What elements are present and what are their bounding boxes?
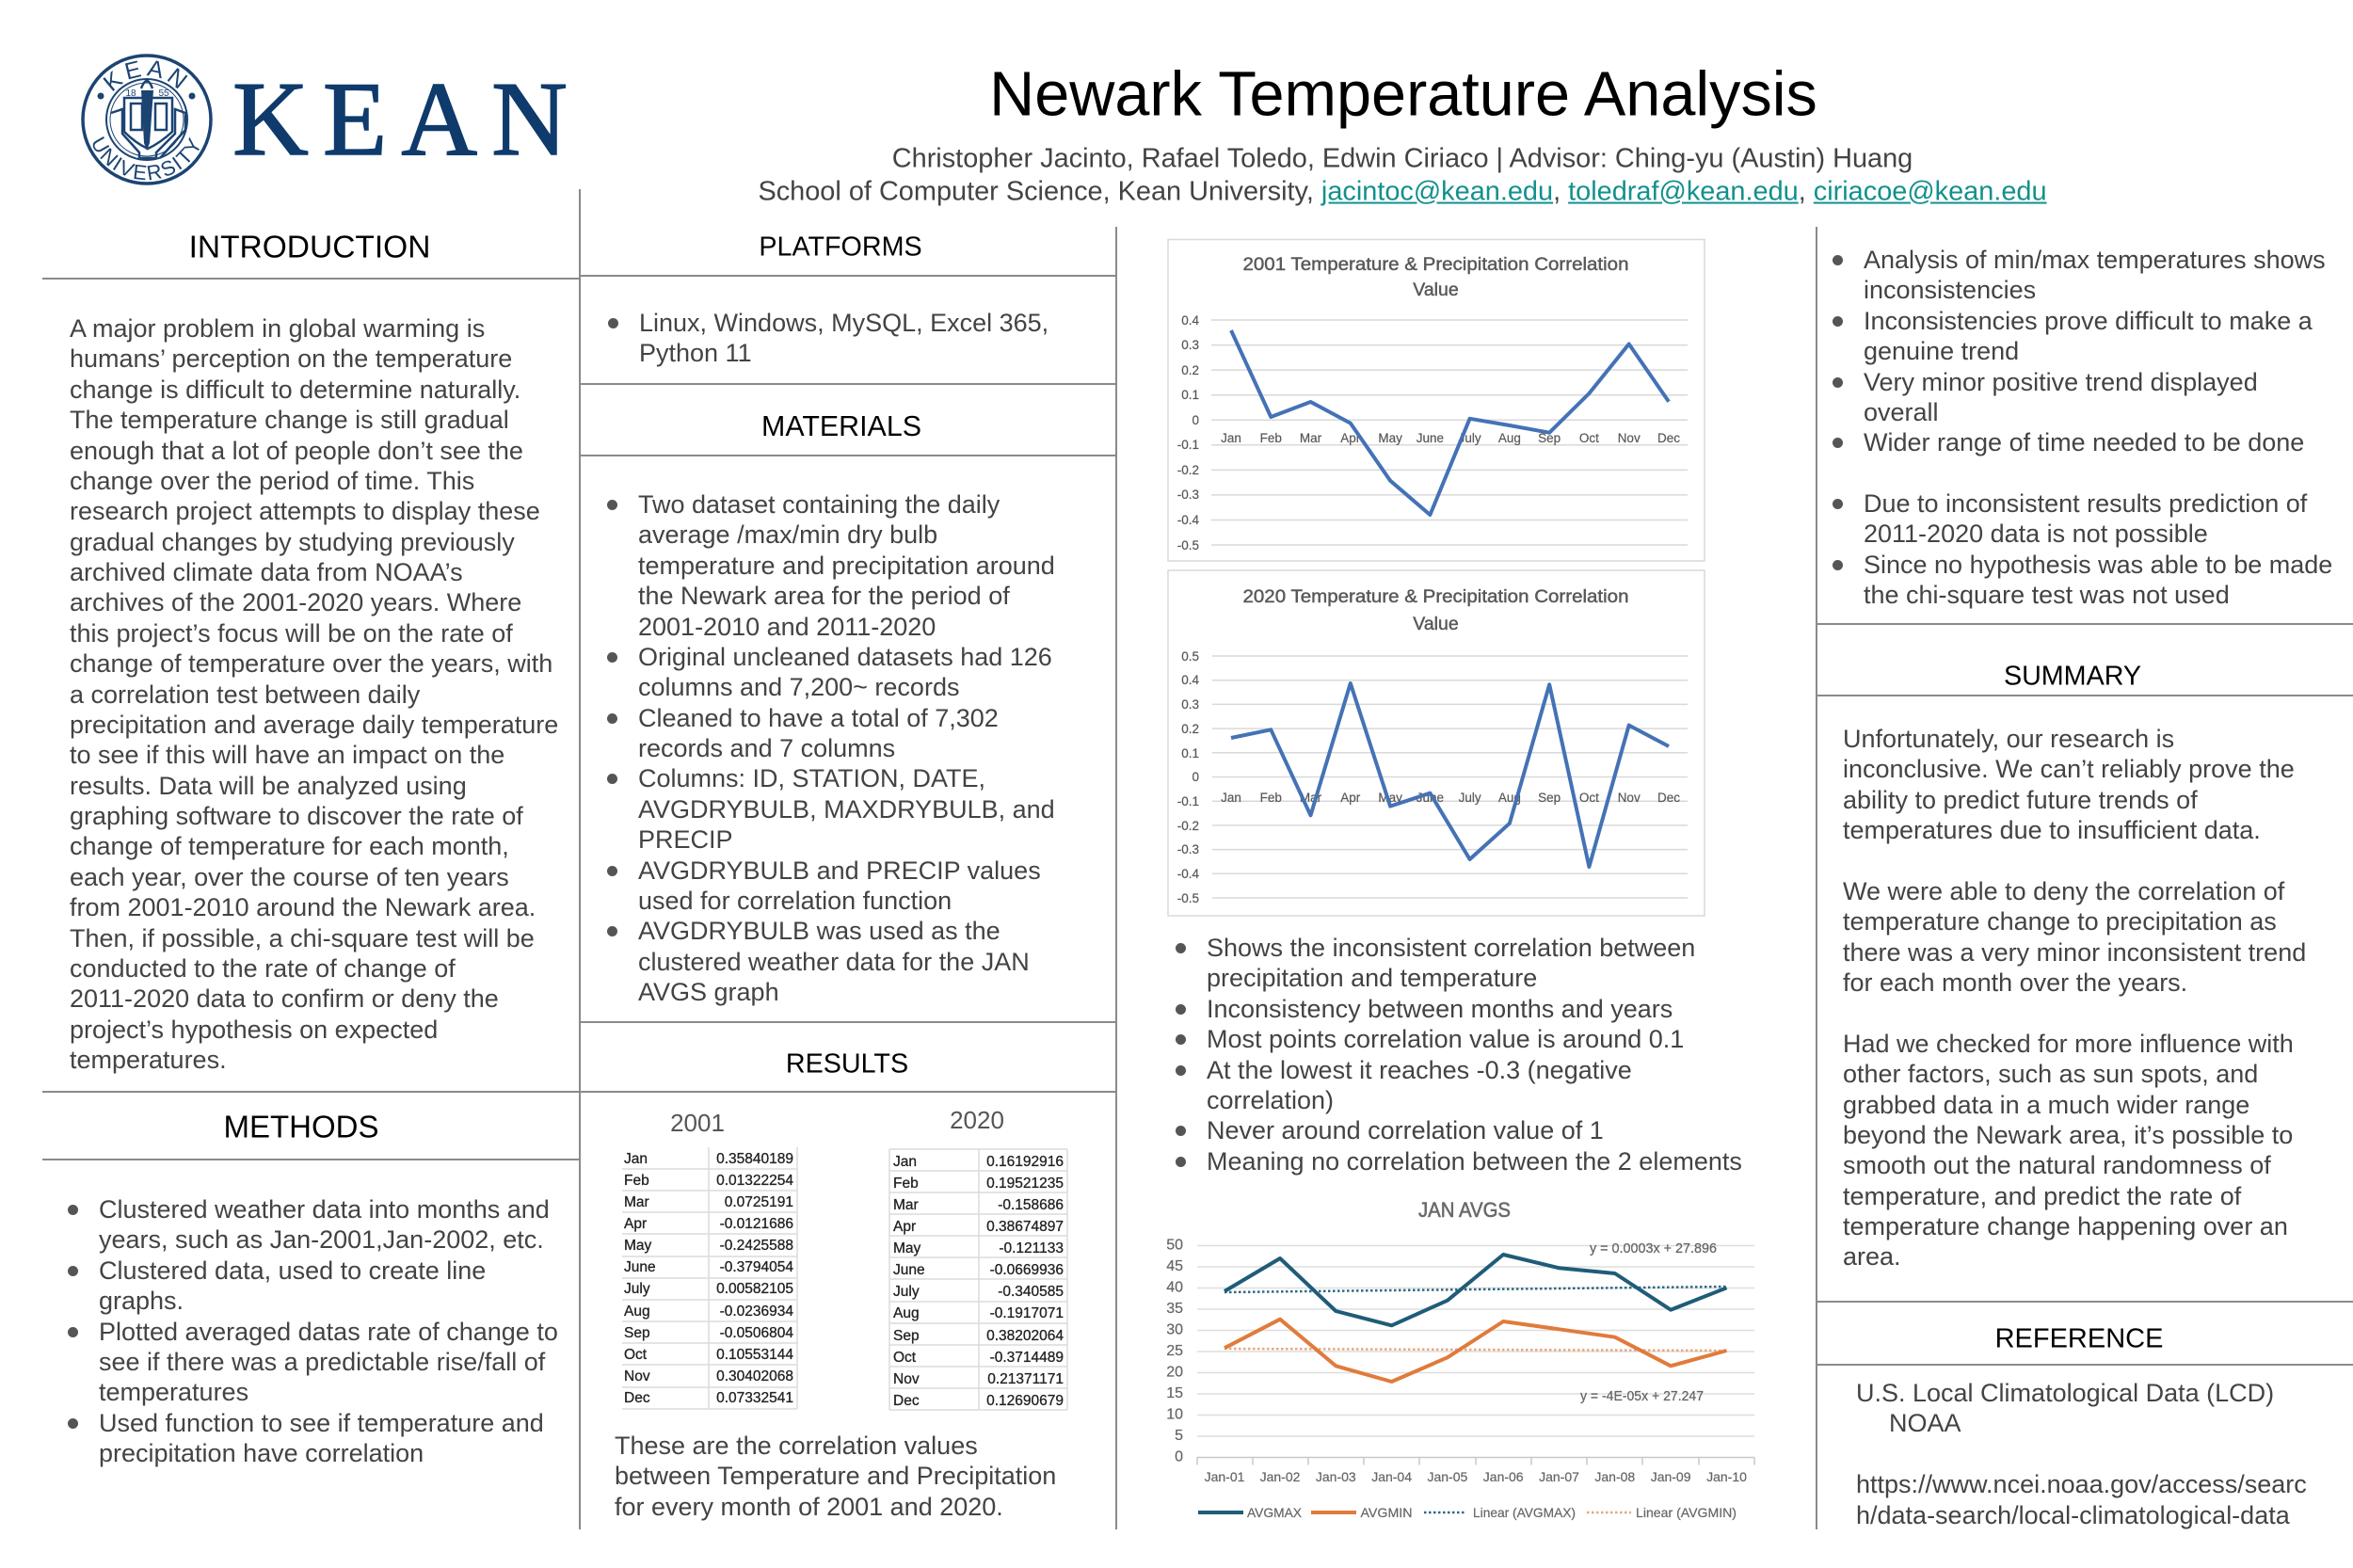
list: materials: Cleaned to have a total of 7,302 [638, 704, 999, 732]
table: 2001 correlation values: Mar [624, 1194, 649, 1210]
chart: JAN AVGS line chart with trend lines: Jan-07 [1539, 1469, 1579, 1484]
text: introduction: change over the period of time. This [70, 467, 474, 495]
logo: Kean University seal and wordmark: 55 [158, 88, 169, 99]
chart: 2020 correlation line chart: July [1459, 791, 1481, 805]
list: materials: columns and 7,200~ records [638, 673, 959, 701]
list: temperature analysis and prediction notes: Due to inconsistent results prediction of [1864, 489, 2307, 518]
heading: methods: METHODS [224, 1109, 378, 1144]
chart: JAN AVGS line chart with trend lines: Jan-10 [1706, 1469, 1747, 1484]
text: introduction: temperatures. [70, 1046, 227, 1074]
text: summary: Had we checked for more influence with [1843, 1030, 2294, 1058]
chart: 2020 correlation line chart: -0.3 [1177, 842, 1199, 856]
text: introduction: research project attempts to display these [70, 497, 540, 525]
chart: 2020 correlation line chart: May [1378, 791, 1402, 805]
logo: Kean University seal and wordmark [81, 54, 582, 185]
chart: 2001 correlation line chart: July [1459, 431, 1481, 445]
chart: 2001 correlation line chart: 0.1 [1181, 388, 1199, 402]
text: introduction: A major problem in global warming is [70, 314, 485, 343]
text: introduction: project’s hypothesis on expected [70, 1016, 438, 1044]
table: 2020 correlation values: Nov [893, 1371, 920, 1387]
chart: 2020 correlation line chart: Apr [1340, 791, 1361, 805]
table: 2020 correlation values: 0.21371171 [987, 1371, 1064, 1387]
text: summary [1843, 725, 2306, 1271]
chart: JAN AVGS line chart with trend lines: 15 [1166, 1385, 1183, 1401]
list: correlation findings [1176, 934, 1742, 1176]
table: 2001 correlation values: -0.0121686 [720, 1216, 793, 1232]
list: methods: see if there was a predictable rise/fall of [99, 1348, 545, 1376]
text: summary: temperature change happening over an [1843, 1212, 2288, 1240]
table: 2001 correlation values: Apr [624, 1216, 647, 1232]
table: 2020 correlation values: -0.158686 [998, 1197, 1064, 1213]
text: introduction: enough that a lot of people don’t see the [70, 437, 523, 465]
text: introduction: Then, if possible, a chi-square test will be [70, 924, 535, 952]
table: 2020 correlation values: Jan [893, 1154, 917, 1170]
table: 2020 correlation values: June [893, 1262, 925, 1278]
heading: materials: MATERIALS [761, 410, 921, 442]
table: 2001 correlation values: -0.2425588 [720, 1238, 793, 1254]
chart: 2001 correlation line chart: June [1417, 431, 1444, 445]
list: temperature analysis and prediction notes: Wider range of time needed to be done [1864, 428, 2304, 456]
text: introduction: conducted to the rate of change of [70, 954, 456, 983]
table: 2001 correlation values: 0.01322254 [716, 1173, 793, 1189]
text: summary: area. [1843, 1242, 1901, 1271]
authors and advisor: Christopher Jacinto, Rafael Toledo, Edwin Ciriaco | Advisor: Ching-yu (Austin) Huang [892, 143, 1913, 173]
list: materials [607, 490, 1055, 1006]
text: reference: https://www.ncei.noaa.gov/access/searc [1856, 1470, 2307, 1498]
list: platforms: Python 11 [639, 339, 752, 367]
chart: JAN AVGS line chart with trend lines: 0 [1175, 1449, 1183, 1464]
list: methods: Clustered data, used to create line [99, 1256, 486, 1285]
chart: JAN AVGS line chart with trend lines: JAN AVGS [1418, 1198, 1511, 1222]
text: introduction: archived climate data from NOAA’s [70, 558, 463, 586]
chart: JAN AVGS line chart with trend lines: 45 [1166, 1258, 1183, 1274]
chart: 2001 correlation line chart: -0.4 [1177, 513, 1199, 527]
chart: 2020 correlation line chart: -0.2 [1177, 819, 1199, 833]
table: 2020 correlation values: Feb [893, 1176, 919, 1192]
table: 2001 correlation values: 0.35840189 [716, 1151, 793, 1167]
text: summary: ability to predict future trends of [1843, 786, 2198, 814]
table: 2001 correlation values: Oct [624, 1347, 648, 1363]
chart: JAN AVGS line chart with trend lines: 35 [1166, 1301, 1183, 1317]
table: 2020 correlation values: Oct [893, 1350, 917, 1366]
text: reference: h/data-search/local-climatological-data [1856, 1500, 2290, 1528]
table: 2001 correlation values: 0.07332541 [716, 1390, 793, 1406]
table: 2020 correlation values: Aug [893, 1305, 920, 1321]
chart: 2001 correlation line chart: Dec [1657, 431, 1680, 445]
chart: JAN AVGS line chart with trend lines: 5 [1175, 1428, 1183, 1444]
table: 2001 correlation values: Feb [624, 1173, 649, 1189]
chart: JAN AVGS line chart with trend lines: 20 [1166, 1365, 1183, 1380]
list: platforms [608, 309, 1048, 367]
chart: JAN AVGS line chart with trend lines: Jan-03 [1316, 1469, 1356, 1484]
heading: introduction: INTRODUCTION [189, 230, 430, 264]
chart: JAN AVGS line chart with trend lines: Linear (AVGMIN) [1636, 1505, 1737, 1520]
list: materials: Columns: ID, STATION, DATE, [638, 764, 985, 792]
chart: 2020 correlation line chart: 0.1 [1181, 746, 1199, 760]
chart: JAN AVGS line chart with trend lines: AVGMIN [1361, 1505, 1412, 1520]
text: summary: temperatures due to insufficient data. [1843, 816, 2261, 844]
text: introduction: gradual changes by studying previously [70, 528, 515, 556]
logo: Kean University seal and wordmark: 18 [125, 88, 136, 99]
chart: 2001 correlation line chart: -0.1 [1177, 438, 1199, 452]
table: 2020 correlation values: 0.38202064 [986, 1328, 1064, 1344]
chart: 2001 correlation line chart: 0.3 [1181, 338, 1199, 352]
list: methods: graphs. [99, 1287, 184, 1315]
table: 2020 correlation values: 0.12690679 [986, 1393, 1064, 1409]
logo: Kean University seal and wordmark: KEAN [232, 61, 582, 178]
chart: 2001 correlation line chart: Oct [1579, 431, 1599, 445]
table: 2020 correlation values: Apr [893, 1219, 916, 1235]
chart: JAN AVGS line chart with trend lines: y = 0.0003x + 27.896 [1590, 1241, 1717, 1256]
chart: 2001 correlation line chart: Mar [1300, 431, 1322, 445]
table: 2020 correlation values: May [893, 1240, 921, 1256]
table: 2020 correlation values: -0.1917071 [990, 1305, 1064, 1321]
text: introduction: 2011-2020 data to confirm or deny the [70, 984, 499, 1013]
table: 2020 correlation values: -0.340585 [998, 1284, 1064, 1300]
chart: 2001 correlation line chart: 0.2 [1181, 363, 1199, 377]
chart: 2001 correlation line chart: Jan [1221, 431, 1241, 445]
text: introduction: to see if this will have an impact on the [70, 741, 504, 769]
chart: JAN AVGS line chart with trend lines: Jan-06 [1483, 1469, 1524, 1484]
chart: 2001 correlation line chart: May [1378, 431, 1402, 445]
list: correlation findings: At the lowest it reaches -0.3 (negative [1207, 1056, 1632, 1084]
table: 2020 correlation values: Sep [893, 1328, 920, 1344]
list: correlation findings: Inconsistency between months and years [1207, 995, 1673, 1023]
table: 2001 correlation values: July [624, 1281, 650, 1297]
table: 2020 correlation values: 0.19521235 [986, 1176, 1064, 1192]
chart: 2001 correlation line chart: Sep [1538, 431, 1561, 445]
chart: 2020 correlation line chart: 0.5 [1181, 649, 1199, 664]
chart: 2020 correlation line chart: -0.4 [1177, 867, 1199, 881]
affiliation and emails: School of Computer Science, Kean University, jacintoc@kean.edu, toledraf@kean.edu, ciriacoe@kean.edu [758, 176, 2047, 206]
list: temperature analysis and prediction notes: Analysis of min/max temperatures shows [1864, 246, 2326, 274]
table: 2020 correlation values: July [893, 1284, 920, 1300]
list: correlation findings: correlation) [1207, 1086, 1334, 1114]
chart: 2020 correlation line chart: Nov [1618, 791, 1641, 805]
chart: 2020 correlation line chart: Oct [1579, 791, 1599, 805]
table: 2001 correlation values: -0.0506804 [720, 1325, 793, 1341]
chart: JAN AVGS line chart with trend lines: Linear (AVGMAX) [1473, 1505, 1576, 1520]
chart: 2001 correlation line chart: Aug [1498, 431, 1521, 445]
list: temperature analysis and prediction notes: Since no hypothesis was able to be made [1864, 551, 2332, 579]
text: introduction: change of temperature over the years, with [70, 649, 552, 678]
chart: 2001 correlation line chart: 2001 Temperature & Precipitation Correlation [1242, 254, 1628, 275]
chart: JAN AVGS line chart with trend lines: AVGMAX [1247, 1505, 1303, 1520]
text: introduction: precipitation and average daily temperature [70, 711, 558, 739]
text: introduction: each year, over the course of ten years [70, 863, 509, 891]
list: temperature analysis and prediction notes: Very minor positive trend displayed [1864, 367, 2258, 395]
list: methods: years, such as Jan-2001,Jan-2002, etc. [99, 1225, 544, 1254]
chart: 2020 correlation line chart: Aug [1498, 791, 1521, 805]
chart: 2020 correlation line chart: Mar [1300, 791, 1322, 805]
list: correlation findings: Shows the inconsistent correlation between [1207, 934, 1695, 962]
list: platforms: Linux, Windows, MySQL, Excel 365, [639, 309, 1048, 337]
text: introduction: from 2001-2010 around the Newark area. [70, 893, 536, 921]
chart: 2020 correlation line chart: 0.3 [1181, 697, 1199, 712]
list: correlation findings: Meaning no correlation between the 2 elements [1207, 1147, 1742, 1176]
list: methods [68, 1195, 558, 1467]
table: 2001 correlation values: Sep [624, 1325, 650, 1341]
text: summary: temperature change to precipitation as [1843, 907, 2277, 936]
chart: 2001 correlation line chart: Feb [1260, 431, 1282, 445]
chart: 2020 correlation line chart: 2020 Temperature & Precipitation Correlation [1242, 586, 1628, 607]
text: summary: there was a very minor inconsistent trend [1843, 938, 2306, 967]
title: Newark Temperature Analysis [989, 59, 1817, 129]
text: introduction: change is difficult to determine naturally. [70, 376, 520, 404]
chart: 2020 correlation line chart: Value [1413, 614, 1459, 634]
list: temperature analysis and prediction notes: overall [1864, 398, 1939, 426]
table: 2020 correlation values: Mar [893, 1197, 919, 1213]
chart: 2020 correlation line chart: -0.5 [1177, 891, 1199, 905]
list: methods: precipitation have correlation [99, 1439, 424, 1467]
list: materials: 2001-2010 and 2011-2020 [638, 612, 936, 640]
table: 2001 correlation values: -0.0236934 [720, 1304, 793, 1320]
text: summary: Unfortunately, our research is [1843, 725, 2174, 753]
text: reference: NOAA [1889, 1409, 1961, 1437]
text: summary: for each month over the years. [1843, 968, 2187, 997]
text: introduction [70, 314, 558, 1074]
list: temperature analysis and prediction notes: 2011-2020 data is not possible [1864, 520, 2208, 548]
text: summary: grabbed data in a much wider range [1843, 1090, 2249, 1118]
list: temperature analysis and prediction notes: Inconsistencies prove difficult to make a [1864, 307, 2313, 335]
chart: 2001 correlation line chart: Apr [1340, 431, 1361, 445]
list: correlation findings: precipitation and temperature [1207, 964, 1537, 992]
list: temperature analysis and prediction notes: inconsistencies [1864, 276, 2036, 304]
table: 2020 correlation values: -0.121133 [999, 1240, 1064, 1256]
table: 2001 correlation values: Dec [624, 1390, 650, 1406]
chart: JAN AVGS line chart with trend lines: 50 [1166, 1237, 1183, 1254]
logo: Kean University seal and wordmark: UNIVERSITY [92, 136, 200, 181]
chart: JAN AVGS line chart with trend lines: Jan-05 [1427, 1469, 1468, 1484]
text: introduction: results. Data will be analyzed using [70, 772, 467, 800]
text: table caption: between Temperature and Precipitation [615, 1462, 1056, 1490]
chart: 2001 correlation line chart: -0.2 [1177, 463, 1199, 477]
list: materials: AVGDRYBULB was used as the [638, 917, 1000, 945]
chart: JAN AVGS line chart with trend lines: Jan-04 [1371, 1469, 1412, 1484]
table: 2001 correlation values: 0.10553144 [716, 1347, 793, 1363]
heading: summary: SUMMARY [2004, 661, 2141, 691]
chart: 2001 correlation line chart: 0 [1192, 413, 1199, 427]
chart: JAN AVGS line chart with trend lines: Jan-01 [1205, 1469, 1245, 1484]
text: introduction: a correlation test between daily [70, 680, 420, 708]
list: materials: temperature and precipitation around [638, 552, 1055, 580]
text: summary: smooth out the natural randomness of [1843, 1151, 2271, 1179]
chart: 2020 correlation line chart: Sep [1538, 791, 1561, 805]
chart: 2020 correlation line chart: 0 [1192, 770, 1199, 784]
list: correlation findings: Most points correlation value is around 0.1 [1207, 1025, 1684, 1053]
heading: results: RESULTS [786, 1048, 908, 1079]
text: introduction: The temperature change is still gradual [70, 406, 509, 434]
table: 2001 correlation values: May [624, 1238, 652, 1254]
text: summary: other factors, such as sun spots, and [1843, 1060, 2258, 1088]
table: 2020 correlation values: 0.38674897 [986, 1219, 1064, 1235]
chart: JAN AVGS line chart with trend lines: Jan-08 [1594, 1469, 1635, 1484]
chart: JAN AVGS line chart with trend lines: Jan-09 [1651, 1469, 1691, 1484]
text: table caption [615, 1432, 1056, 1521]
list: methods: Used function to see if temperature and [99, 1409, 544, 1437]
list: materials: records and 7 columns [638, 734, 895, 762]
chart: 2001 correlation line chart: -0.5 [1177, 538, 1199, 552]
table: 2001 correlation values: June [624, 1259, 656, 1275]
text: table caption: These are the correlation values [615, 1432, 978, 1460]
chart: JAN AVGS line chart with trend lines: y = -4E-05x + 27.247 [1580, 1389, 1704, 1404]
text: summary: We were able to deny the correlation of [1843, 877, 2284, 905]
list: materials: Original uncleaned datasets had 126 [638, 643, 1052, 671]
list: temperature analysis and prediction notes [1833, 246, 2332, 609]
text: summary: beyond the Newark area, it’s possible to [1843, 1121, 2293, 1149]
table: 2020 correlation values: -0.0669936 [990, 1262, 1064, 1278]
table: 2001 correlation values: Nov [624, 1368, 650, 1384]
chart: JAN AVGS line chart with trend lines: 10 [1166, 1406, 1183, 1423]
list: materials: clustered weather data for the JAN [638, 948, 1030, 976]
list: temperature analysis and prediction notes: the chi-square test was not used [1864, 581, 2230, 609]
text: summary: inconclusive. We can’t reliably prove the [1843, 755, 2295, 783]
logo: Kean University seal and wordmark: KEAN [103, 60, 188, 91]
list: materials: AVGDRYBULB, MAXDRYBULB, and [638, 795, 1055, 824]
table: 2001 correlation values: Jan [624, 1151, 648, 1167]
text: introduction: graphing software to discover the rate of [70, 802, 523, 830]
chart: JAN AVGS line chart with trend lines: 25 [1166, 1343, 1183, 1359]
chart: JAN AVGS line chart with trend lines: 30 [1166, 1321, 1183, 1338]
list: materials: the Newark area for the period of [638, 582, 1010, 610]
chart: 2020 correlation line chart: Jan [1221, 791, 1241, 805]
chart: 2001 correlation line chart: 0.4 [1181, 313, 1199, 328]
chart: JAN AVGS line chart with trend lines: Jan-02 [1260, 1469, 1301, 1484]
text: reference [1856, 1379, 2307, 1528]
list: methods: Clustered weather data into months and [99, 1195, 550, 1224]
list: materials: Two dataset containing the daily [638, 490, 1000, 519]
table: 2020 correlation values: Dec [893, 1393, 920, 1409]
table: 2001 correlation values: 0.0725191 [725, 1194, 793, 1210]
heading: reference: REFERENCE [1995, 1323, 2163, 1353]
text: reference: U.S. Local Climatological Data (LCD) [1856, 1379, 2274, 1407]
text: table caption: for every month of 2001 and 2020. [615, 1493, 1003, 1521]
list: materials: AVGS graph [638, 978, 779, 1006]
text: introduction: this project’s focus will be on the rate of [70, 619, 513, 648]
table: 2020 correlation values: 0.16192916 [986, 1154, 1064, 1170]
chart: 2020 correlation line chart: June [1417, 791, 1444, 805]
table: 2020 correlation values: -0.3714489 [990, 1350, 1064, 1366]
list: materials: used for correlation function [638, 887, 952, 915]
chart: 2020 correlation line chart: 0.4 [1181, 673, 1199, 687]
chart: 2001 correlation line chart: Nov [1618, 431, 1641, 445]
list: materials: PRECIP [638, 825, 733, 854]
list: materials: AVGDRYBULB and PRECIP values [638, 856, 1041, 885]
table: 2001 correlation values: 0.00582105 [716, 1281, 793, 1297]
table: 2001 correlation values: 2001 [670, 1109, 725, 1137]
list: methods: Plotted averaged datas rate of change to [99, 1318, 558, 1346]
list: materials: average /max/min dry bulb [638, 520, 937, 549]
chart: 2001 correlation line chart: Value [1413, 280, 1459, 300]
chart: 2020 correlation line chart: 0.2 [1181, 722, 1199, 736]
text: introduction: archives of the 2001-2020 years. Where [70, 588, 521, 616]
chart: 2020 correlation line chart: -0.1 [1177, 794, 1199, 808]
chart: 2020 correlation line chart: Dec [1657, 791, 1680, 805]
table: 2001 correlation values: 0.30402068 [716, 1368, 793, 1384]
list: methods: temperatures [99, 1378, 248, 1406]
list: correlation findings: Never around correlation value of 1 [1207, 1116, 1604, 1144]
table: 2020 correlation values: 2020 [950, 1106, 1004, 1134]
text: summary: temperature, and predict the rate of [1843, 1182, 2241, 1210]
chart: 2001 correlation line chart: -0.3 [1177, 488, 1199, 502]
list: temperature analysis and prediction notes: genuine trend [1864, 337, 2019, 365]
text: introduction: change of temperature for each month, [70, 832, 509, 860]
chart: JAN AVGS line chart with trend lines: 40 [1166, 1280, 1183, 1295]
text: introduction: humans’ perception on the temperature [70, 344, 512, 373]
table: 2001 correlation values: -0.3794054 [720, 1259, 793, 1275]
table: 2001 correlation values: Aug [624, 1304, 650, 1320]
heading: platforms: PLATFORMS [759, 232, 922, 262]
chart: 2020 correlation line chart: Feb [1260, 791, 1282, 805]
